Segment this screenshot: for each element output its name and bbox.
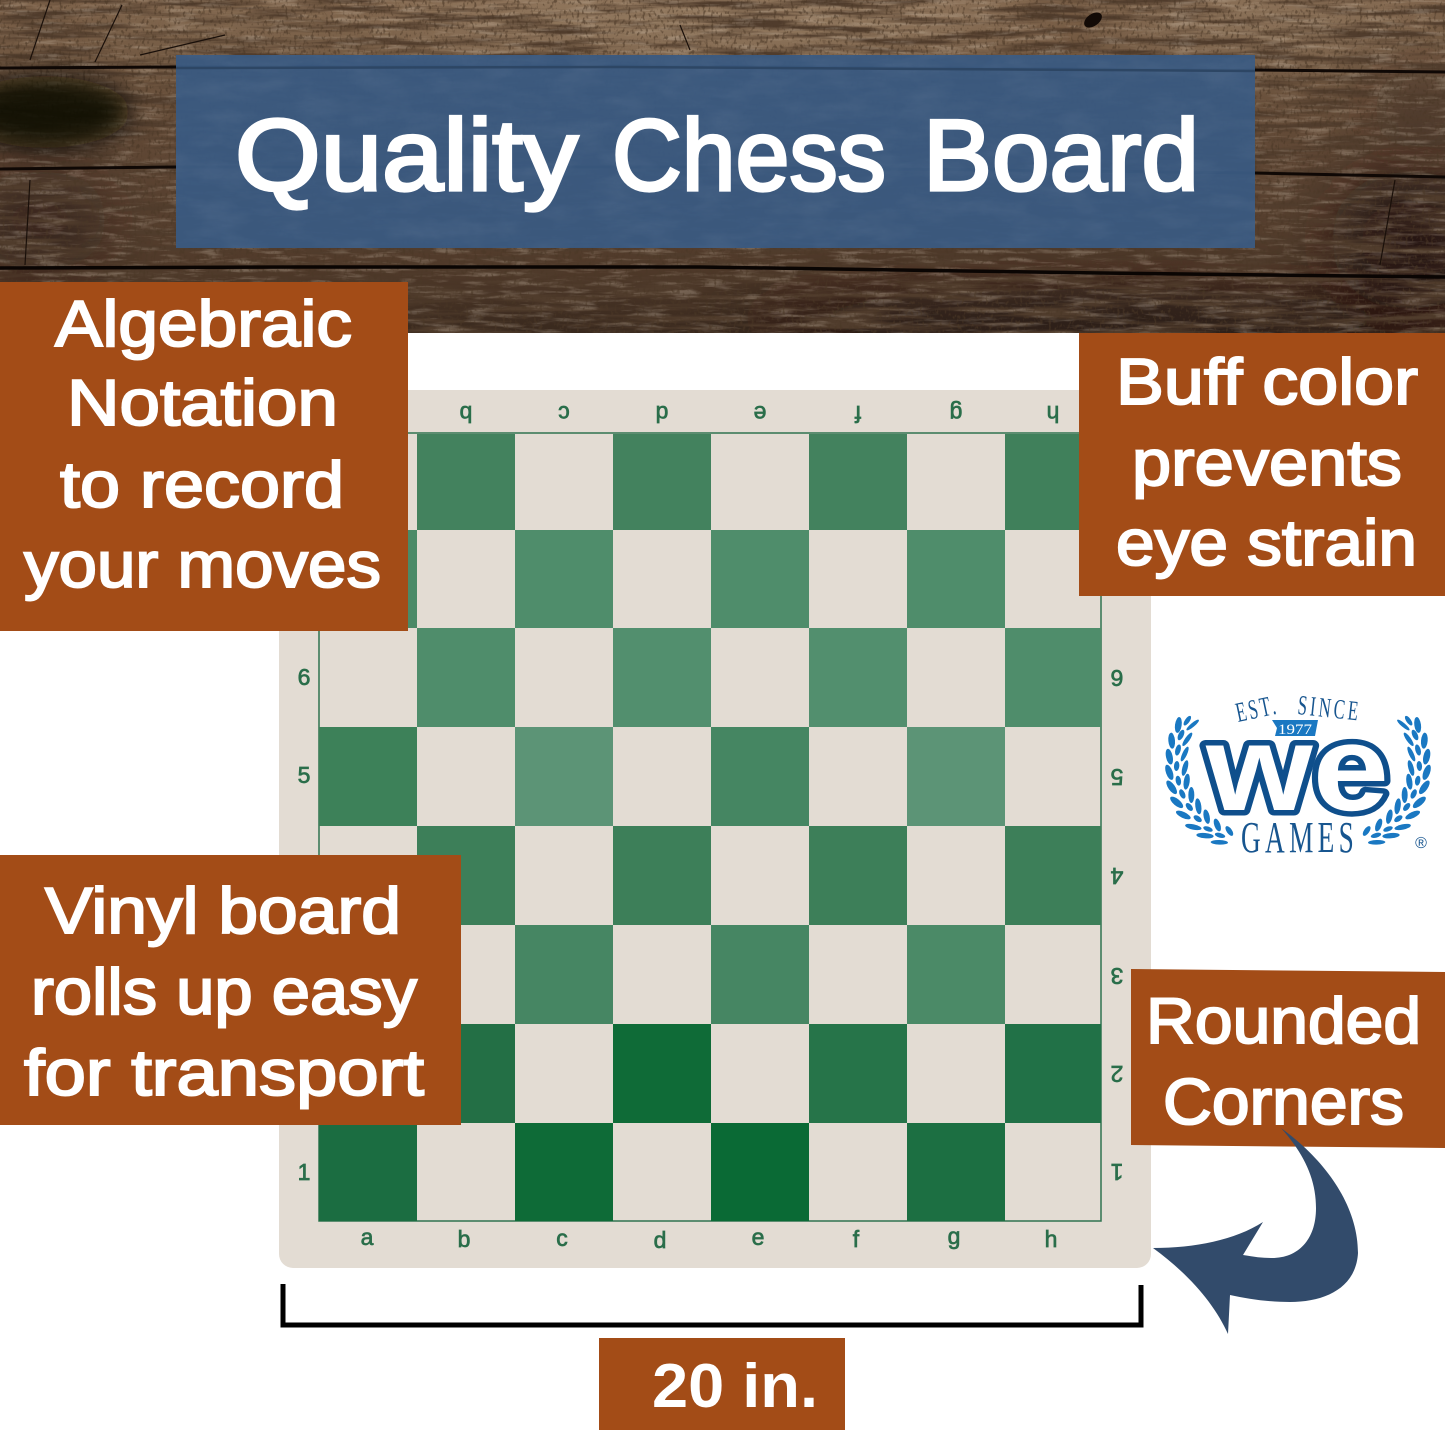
- callout: buff color: [1079, 333, 1445, 596]
- size bracket: [283, 1284, 1141, 1325]
- file letters: bottom edge: f: [853, 1226, 860, 1252]
- est since: EST.: [1233, 688, 1281, 728]
- callout: algebraic notation: Notation: [67, 366, 338, 439]
- callout: buff color: Buff color: [1116, 345, 1418, 418]
- callout: vinyl board: for transport: [24, 1036, 424, 1109]
- rank numbers: right edge, upside down: 5: [1111, 764, 1123, 790]
- logo: WE Games: SINCE: [1296, 689, 1363, 727]
- callout: vinyl board: [0, 855, 461, 1125]
- rank numbers: right edge, upside down: 3: [1111, 963, 1123, 989]
- file letters: bottom edge: c: [556, 1225, 568, 1251]
- title: Board: [923, 100, 1199, 212]
- rank numbers: right edge, upside down: 6: [1111, 665, 1123, 691]
- rank numbers: right edge, upside down: 2: [1111, 1061, 1123, 1087]
- file letters: top edge, upside down: e: [754, 401, 766, 427]
- file letters: bottom edge: g: [948, 1223, 960, 1249]
- registered mark: ®: [1415, 835, 1427, 852]
- file letters: bottom edge: a: [361, 1224, 374, 1250]
- file letters: top edge, upside down: d: [656, 401, 668, 427]
- size label: 20 in.: [652, 1352, 818, 1421]
- file letters: bottom edge: d: [654, 1227, 666, 1253]
- callout: algebraic notation: [0, 282, 408, 631]
- wood plank header: [0, 0, 1445, 348]
- callout: vinyl board: Vinyl board: [45, 874, 401, 947]
- games: GAMES: [1241, 812, 1358, 862]
- callout: rounded corners: [1131, 969, 1445, 1148]
- callout: vinyl board: rolls up easy: [31, 955, 418, 1028]
- title: Chess: [612, 100, 886, 212]
- 1977 banner: [1272, 720, 1318, 738]
- laurel wreath right: [1361, 715, 1433, 845]
- file letters: top edge, upside down: b: [460, 401, 472, 427]
- size label: [599, 1338, 845, 1430]
- callout: algebraic notation: your moves: [24, 528, 381, 601]
- we wordmark: we: [1205, 700, 1389, 836]
- callout: algebraic notation: to record: [60, 448, 344, 521]
- callout: algebraic notation: Algebraic: [55, 287, 352, 360]
- rank numbers: left edge: [298, 664, 310, 1185]
- arrow pointing to rounded corner: [1153, 1128, 1358, 1334]
- file letters: top edge, upside down: f: [854, 401, 861, 427]
- rank numbers: right edge, upside down: 1: [1111, 1159, 1123, 1185]
- title banner: [176, 55, 1255, 248]
- board grid: [319, 433, 1101, 1221]
- title: [235, 100, 1199, 212]
- rank numbers: right edge, upside down: 4: [1110, 863, 1123, 889]
- chess board: [279, 390, 1151, 1268]
- callout: buff color: eye strain: [1116, 506, 1417, 579]
- file letters: bottom edge: h: [1045, 1226, 1057, 1252]
- rank numbers: left edge: 6: [298, 664, 310, 690]
- title: Quality: [235, 100, 579, 212]
- file letters: top edge, upside down: c: [558, 401, 570, 427]
- file letters: bottom edge: e: [752, 1224, 764, 1250]
- file letters: top edge, upside down: g: [950, 401, 962, 427]
- file letters: bottom edge: [361, 1223, 1057, 1253]
- file letters: top edge, upside down: [460, 401, 1059, 427]
- rank numbers: left edge: 1: [298, 1159, 310, 1185]
- callout: rounded corners: Rounded: [1146, 984, 1421, 1057]
- file letters: bottom edge: b: [458, 1226, 470, 1252]
- 1977 banner: 1977: [1278, 722, 1313, 738]
- logo: WE Games: [1163, 688, 1433, 862]
- rank numbers: right edge, upside down: [1110, 665, 1123, 1185]
- laurel wreath left: [1163, 715, 1235, 845]
- callout: buff color: prevents: [1132, 426, 1402, 499]
- callout: rounded corners: Corners: [1163, 1065, 1404, 1138]
- file letters: top edge, upside down: h: [1047, 401, 1059, 427]
- rank numbers: left edge: 5: [298, 762, 310, 788]
